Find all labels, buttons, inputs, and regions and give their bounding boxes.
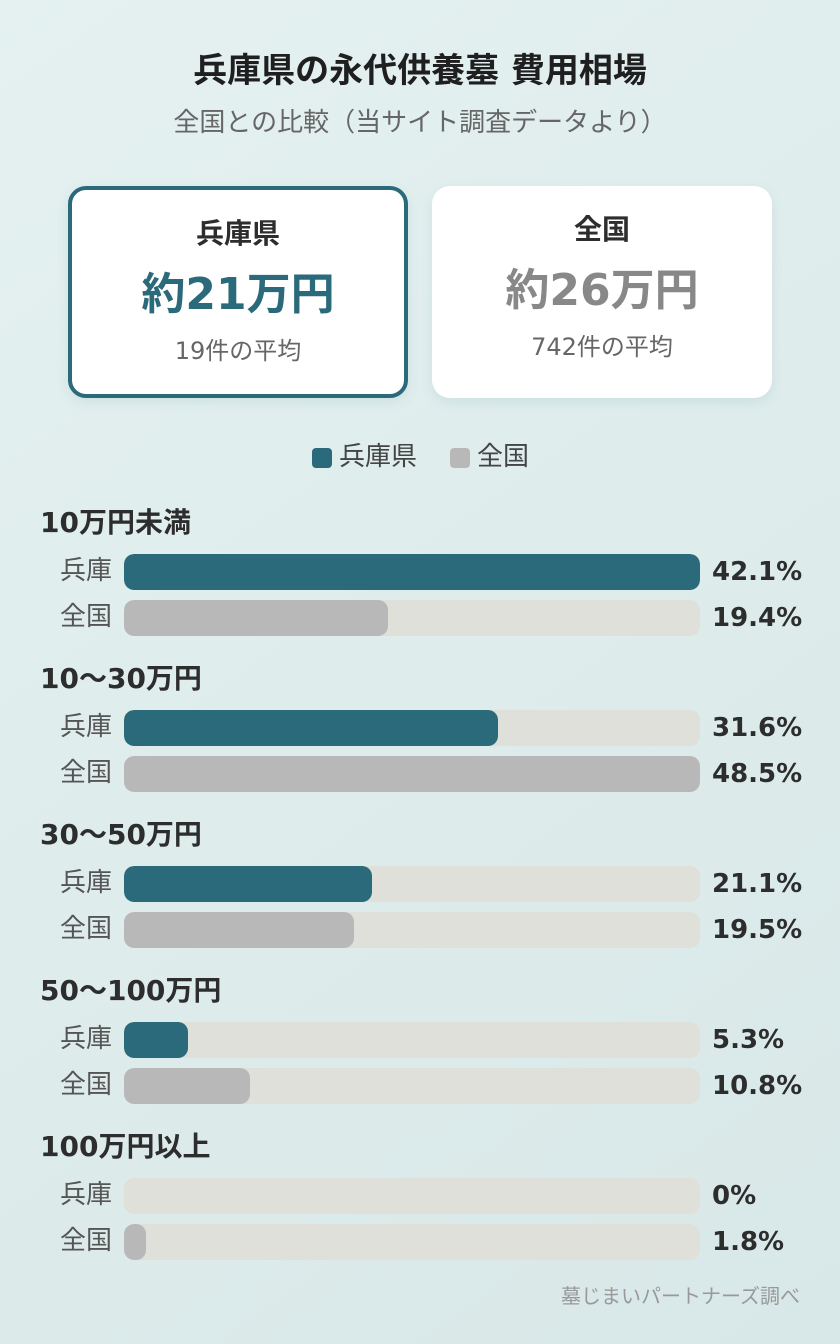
legend label: Hyogo: 兵庫県 [339, 442, 417, 472]
national sample count: 742件の平均 [531, 333, 673, 361]
panel: Hyogo summary card [68, 186, 408, 398]
national row [60, 1224, 784, 1260]
national row: 全国 [60, 1226, 112, 1256]
Hyogo row [60, 554, 802, 590]
Hyogo average price: 約21万円 [141, 269, 335, 320]
legend swatch: national [450, 448, 470, 468]
national row: 48.5% [712, 759, 802, 789]
Hyogo row: 0% [712, 1181, 756, 1211]
Hyogo row [60, 866, 802, 902]
Hyogo row [60, 1178, 756, 1214]
group heading: 10万円未満 [40, 506, 191, 539]
Hyogo row: 兵庫 [60, 868, 112, 898]
bar group: 1M yen and over [40, 1130, 784, 1260]
national row [60, 600, 802, 636]
group heading: 50～100万円 [40, 974, 221, 1007]
Hyogo row: 42.1% [712, 557, 802, 587]
national average price: 約26万円 [505, 265, 699, 316]
Hyogo row: 兵庫 [60, 1180, 112, 1210]
title: 兵庫県の永代供養墓 費用相場 [193, 51, 647, 91]
national row: 全国 [60, 1070, 112, 1100]
group heading: 100万円以上 [40, 1130, 210, 1163]
national row: 全国 [60, 914, 112, 944]
Hyogo card label: 兵庫県 [196, 217, 280, 250]
legend [312, 442, 529, 472]
Hyogo row: 21.1% [712, 869, 802, 899]
bar group: under 100k yen [40, 506, 802, 636]
national card label: 全国 [574, 213, 630, 246]
source credit: 墓じまいパートナーズ調べ [561, 1284, 800, 1308]
bar group: 500k to 1M yen [40, 974, 802, 1104]
national row [60, 1068, 802, 1104]
group heading: 10～30万円 [40, 662, 202, 695]
national row [60, 756, 802, 792]
Hyogo row: 兵庫 [60, 712, 112, 742]
national row: 全国 [60, 758, 112, 788]
group heading: 30～50万円 [40, 818, 202, 851]
national row: 19.4% [712, 603, 802, 633]
national row: 全国 [60, 602, 112, 632]
subtitle: 全国との比較（当サイト調査データより） [173, 108, 667, 138]
national row: 19.5% [712, 915, 802, 945]
national row [60, 912, 802, 948]
Hyogo row: 兵庫 [60, 1024, 112, 1054]
Hyogo row: 5.3% [712, 1025, 784, 1055]
national row: 1.8% [712, 1227, 784, 1257]
panel: national summary card [432, 186, 772, 398]
bar group: 100k to 300k yen [40, 662, 802, 792]
legend label: national: 全国 [477, 442, 529, 472]
Hyogo row [60, 710, 802, 746]
Hyogo row: 兵庫 [60, 556, 112, 586]
Hyogo row [60, 1022, 784, 1058]
legend swatch: Hyogo [312, 448, 332, 468]
bar group: 300k to 500k yen [40, 818, 802, 948]
Hyogo sample count: 19件の平均 [175, 337, 301, 365]
Hyogo row: 31.6% [712, 713, 802, 743]
national row: 10.8% [712, 1071, 802, 1101]
